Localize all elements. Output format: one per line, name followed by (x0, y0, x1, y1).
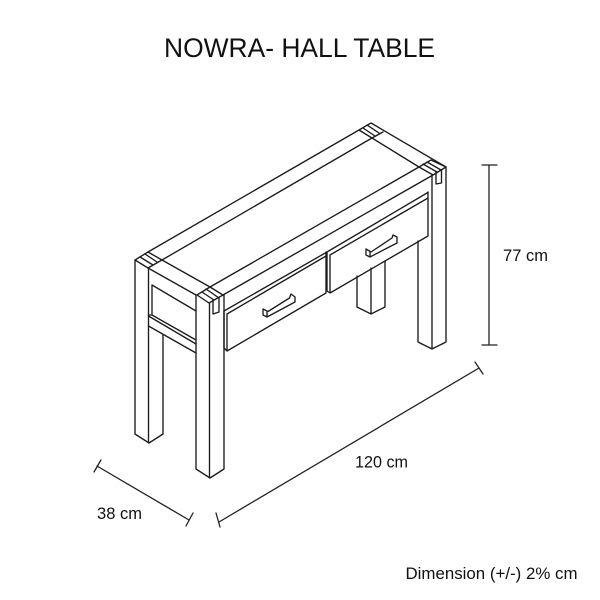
hall table line drawing (135, 123, 446, 478)
front right leg (418, 167, 446, 349)
label: 77 cm: 77 cm (503, 247, 548, 265)
right drawer (327, 192, 428, 293)
label: 38 cm: 38 cm (97, 505, 142, 523)
dimension: width 120 cm (216, 362, 483, 527)
rear left leg and side rail (135, 260, 196, 443)
dimension: height 77 cm (482, 165, 497, 345)
note: dimension tolerance: Dimension (+/-) 2% cm (406, 565, 578, 583)
label: 120 cm: 120 cm (355, 454, 408, 472)
dimension: depth 38 cm (94, 460, 193, 526)
rear right leg (357, 261, 385, 314)
title: NOWRA- HALL TABLE (164, 33, 435, 63)
table top (135, 123, 446, 303)
front left leg (196, 295, 224, 478)
left drawer (224, 252, 327, 351)
right drawer handle (366, 235, 397, 257)
left drawer handle (263, 294, 295, 317)
